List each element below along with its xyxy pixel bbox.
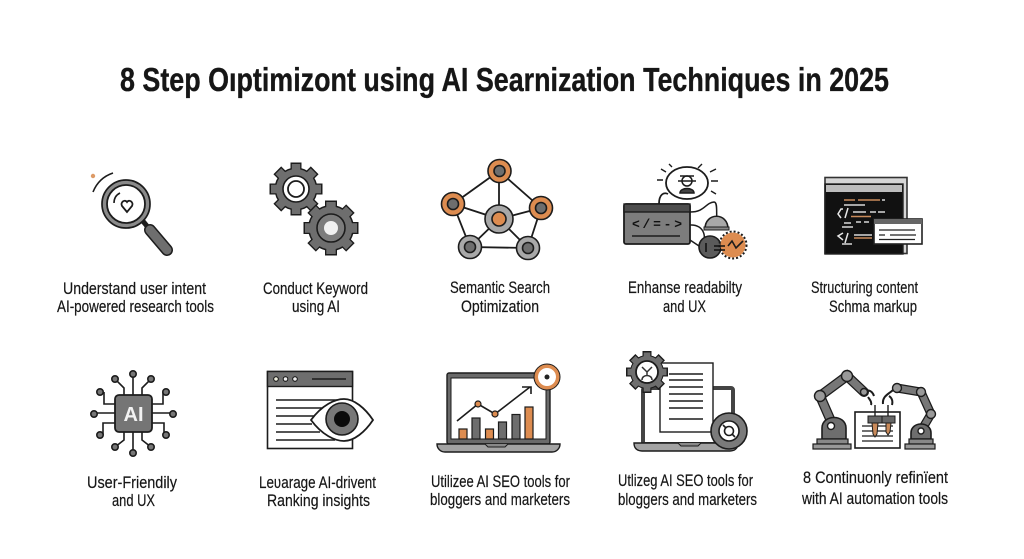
- label: step 5: Structuring content: [811, 278, 918, 297]
- label: step 1: Understand user intent: [63, 279, 206, 298]
- icon: semantic network: [442, 160, 552, 260]
- label: step 7: Ranking insights: [267, 491, 370, 510]
- label: step 6: User-Friendily: [87, 473, 177, 492]
- label: step 4: Enhanse readabilty: [628, 278, 742, 297]
- label: step 8: bloggers and marketers: [430, 490, 570, 509]
- label: step 10: 8 Continuonly refinïent: [803, 468, 948, 487]
- label: step 2: using AI: [292, 297, 340, 316]
- label: step 3: Optimization: [461, 297, 539, 316]
- label: step 3: [450, 278, 550, 316]
- icon: AI chip: AI: [124, 404, 144, 426]
- icon: code window with user bubble: [624, 164, 746, 258]
- icon: laptop with document, gear and target: [626, 351, 747, 451]
- label: step 10: with AI automation tools: [801, 489, 948, 508]
- icon: AI chip: [91, 371, 176, 456]
- label: step 10: [801, 468, 948, 508]
- label: step 6: [87, 473, 177, 510]
- label: step 4: and UX: [663, 297, 706, 316]
- label: step 1: [57, 279, 214, 316]
- label: step 5: [811, 278, 918, 316]
- icon: laptop with chart: [437, 364, 560, 452]
- label: step 3: Semantic Search: [450, 278, 550, 297]
- label: step 9: [618, 471, 757, 509]
- icon: browser window with eye: [268, 372, 373, 448]
- label: step 9: bloggers and marketers: [618, 490, 757, 509]
- icon: code window with user bubble: </=->: [632, 217, 682, 232]
- label: step 7: Leʋarage AI-drivent: [259, 473, 376, 492]
- label: step 2: Conduct Keyword: [263, 279, 368, 298]
- icon: robot arms with document: [813, 370, 936, 449]
- icon: schema code window: [825, 178, 922, 254]
- label: step 8: Utilizee AI SEO tools for: [431, 472, 570, 491]
- label: step 2: [263, 279, 368, 316]
- label: step 6: and UX: [112, 491, 155, 510]
- label: step 9: Utlizeg AI SEO tools for: [618, 471, 753, 490]
- label: step 4: [628, 278, 742, 316]
- icon: gears: [270, 162, 358, 256]
- label: step 5: Schma markup: [829, 297, 917, 316]
- label: step 1: AI-powered research tools: [57, 297, 214, 316]
- icon: magnifying glass: [91, 173, 167, 250]
- label: step 8: [430, 472, 570, 509]
- label: step 7: [259, 473, 376, 510]
